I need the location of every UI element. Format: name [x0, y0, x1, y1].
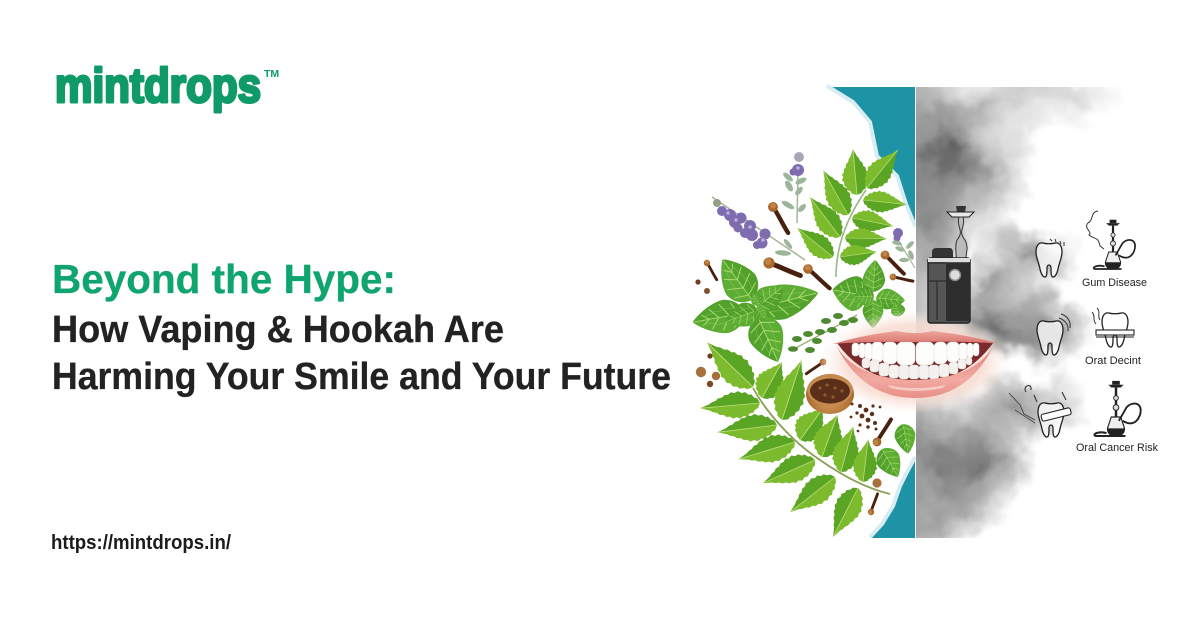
label: gum disease: Gum Disease — [1082, 277, 1147, 289]
title — [52, 256, 671, 398]
bottom neem frond — [696, 331, 890, 543]
risk panel: gum disease — [1036, 211, 1147, 289]
risk panel: oral decay — [1037, 308, 1141, 367]
spice bowl — [806, 374, 854, 414]
cloves — [699, 200, 913, 516]
thyme sprig — [788, 313, 858, 353]
lower teeth — [862, 357, 972, 379]
peppercorns and nuts — [695, 279, 882, 488]
label: oral cancer risk: Oral Cancer Risk — [1076, 442, 1159, 454]
logo: mintdrops: mintdrops — [55, 60, 261, 113]
mint cluster left — [690, 249, 822, 369]
title line: how vaping: How Vaping & Hookah Are — [52, 309, 504, 351]
top neem frond — [790, 142, 908, 277]
title line: harming: Harming Your Smile and Your Future — [52, 356, 671, 398]
smile: lips and teeth — [819, 310, 1011, 414]
upper teeth — [852, 342, 979, 365]
risk panel: oral cancer risk — [1009, 381, 1159, 454]
illustration: herbs and smile versus smoke — [690, 60, 1159, 551]
icon: tooth with gum irritation — [1036, 239, 1064, 277]
teal torn paper panel — [827, 86, 915, 538]
logo trademark: TM — [264, 68, 279, 80]
mint cluster right — [829, 259, 918, 483]
vape device and hookah — [928, 206, 974, 323]
scattered seeds — [850, 402, 881, 432]
lavender sprigs — [712, 152, 915, 268]
icon: hookah — [1095, 381, 1141, 436]
icon: tooth on bar — [1092, 308, 1134, 347]
icon: hookah with smoke — [1087, 211, 1135, 269]
title line: green: Beyond the Hype: — [52, 256, 396, 302]
icon: damaged tooth with cigarette — [1009, 386, 1072, 437]
icon: tooth with sound lines — [1037, 314, 1070, 355]
smoke clouds — [916, 87, 1114, 538]
website url: https://mintdrops.in/ — [51, 532, 231, 554]
label: orat decint: Orat Decint — [1085, 355, 1141, 367]
